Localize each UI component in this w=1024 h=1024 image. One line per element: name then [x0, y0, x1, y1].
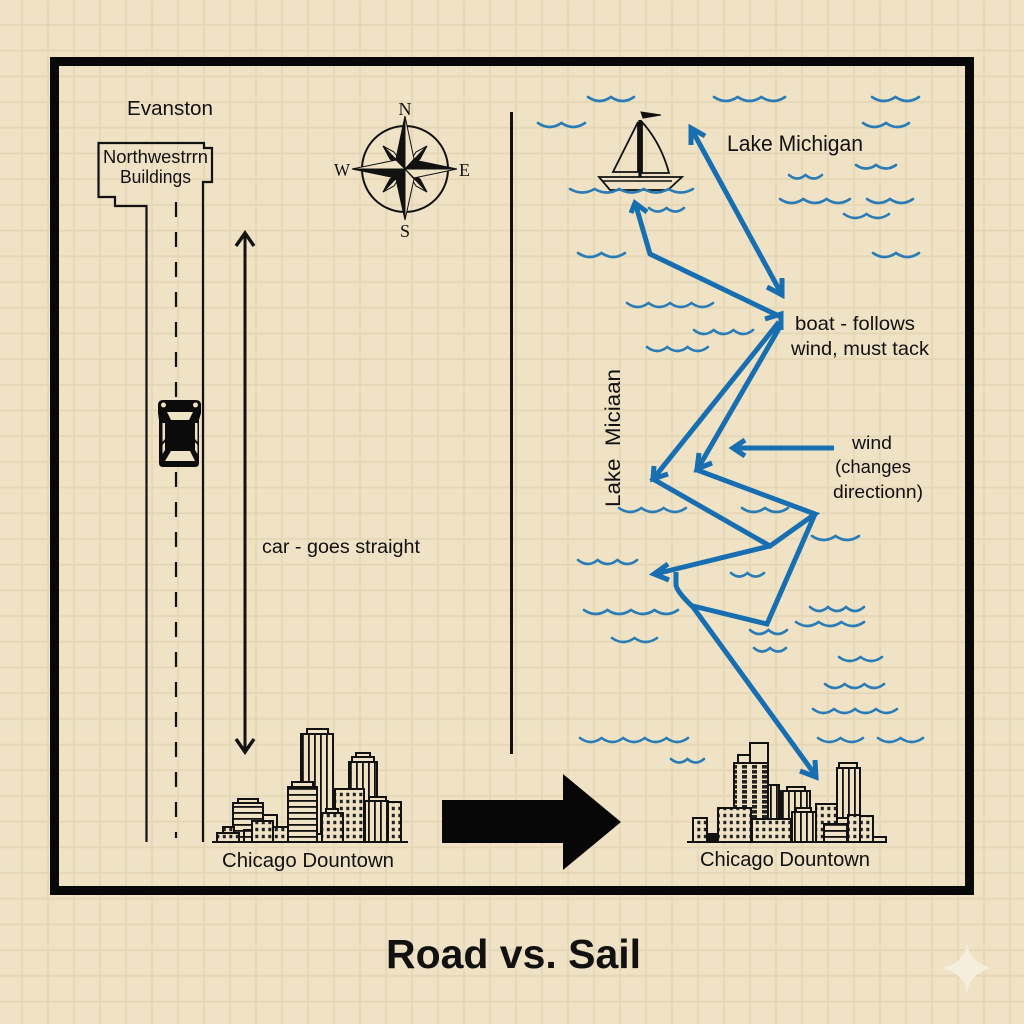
label: boat follows wind: wind, must tack: [790, 338, 929, 360]
double-headed distance arrow: [236, 233, 254, 752]
label: boat follows wind: boat - follows: [795, 313, 915, 335]
label: Northwestern Buildings: Northwestrrn: [103, 147, 208, 167]
panel: road route: [98, 98, 470, 872]
icon: compass rose: S: [400, 221, 410, 241]
label: Lake Michigan, top: Lake Michigan: [727, 131, 863, 156]
icon: compass rose: [334, 99, 470, 241]
road and Northwestern building outline: [98, 143, 212, 842]
wind arrow: [733, 440, 834, 456]
road centre dashed line: [175, 202, 177, 838]
label: Chicago Downtown, left: Chicago Dountown: [222, 849, 394, 872]
label: car goes straight: car - goes straight: [262, 537, 421, 558]
panel: sailing route: [538, 97, 929, 871]
outer frame: [54, 62, 970, 890]
label: Evanston: Evanston: [127, 98, 213, 120]
icon: compass rose: W: [334, 160, 350, 180]
label: Northwestern Buildings: Buildings: [120, 167, 191, 187]
waves over the boat hull: [570, 189, 693, 192]
label: Lake Michigan, rotated: Lake Miciaan: [602, 369, 625, 507]
icon: sparkle watermark: [942, 943, 992, 993]
icon: Chicago skyline, left: [212, 729, 408, 842]
label: Northwestern Buildings: [103, 147, 208, 187]
centre divider line: [510, 112, 513, 754]
lake waves: [538, 97, 923, 762]
double-headed arrow: tack distance: [691, 128, 782, 295]
label: boat follows wind: [790, 313, 929, 360]
icon: compass rose: E: [459, 160, 470, 180]
label: wind changes direction: wind: [851, 432, 892, 453]
label: wind changes direction: [833, 432, 923, 502]
sailing route legs: [631, 203, 816, 777]
label: wind changes direction: (changes: [835, 456, 911, 477]
big transition arrow: [442, 774, 621, 870]
label: Chicago Downtown, right: Chicago Dountown: [700, 848, 870, 871]
label: wind changes direction: directionn): [833, 481, 923, 502]
icon: Chicago skyline, right: [687, 743, 887, 842]
title: Road vs. Sail: [386, 931, 641, 977]
icon: compass rose: N: [398, 99, 412, 119]
icon: sailboat: [599, 112, 682, 190]
icon: car: [158, 400, 201, 467]
